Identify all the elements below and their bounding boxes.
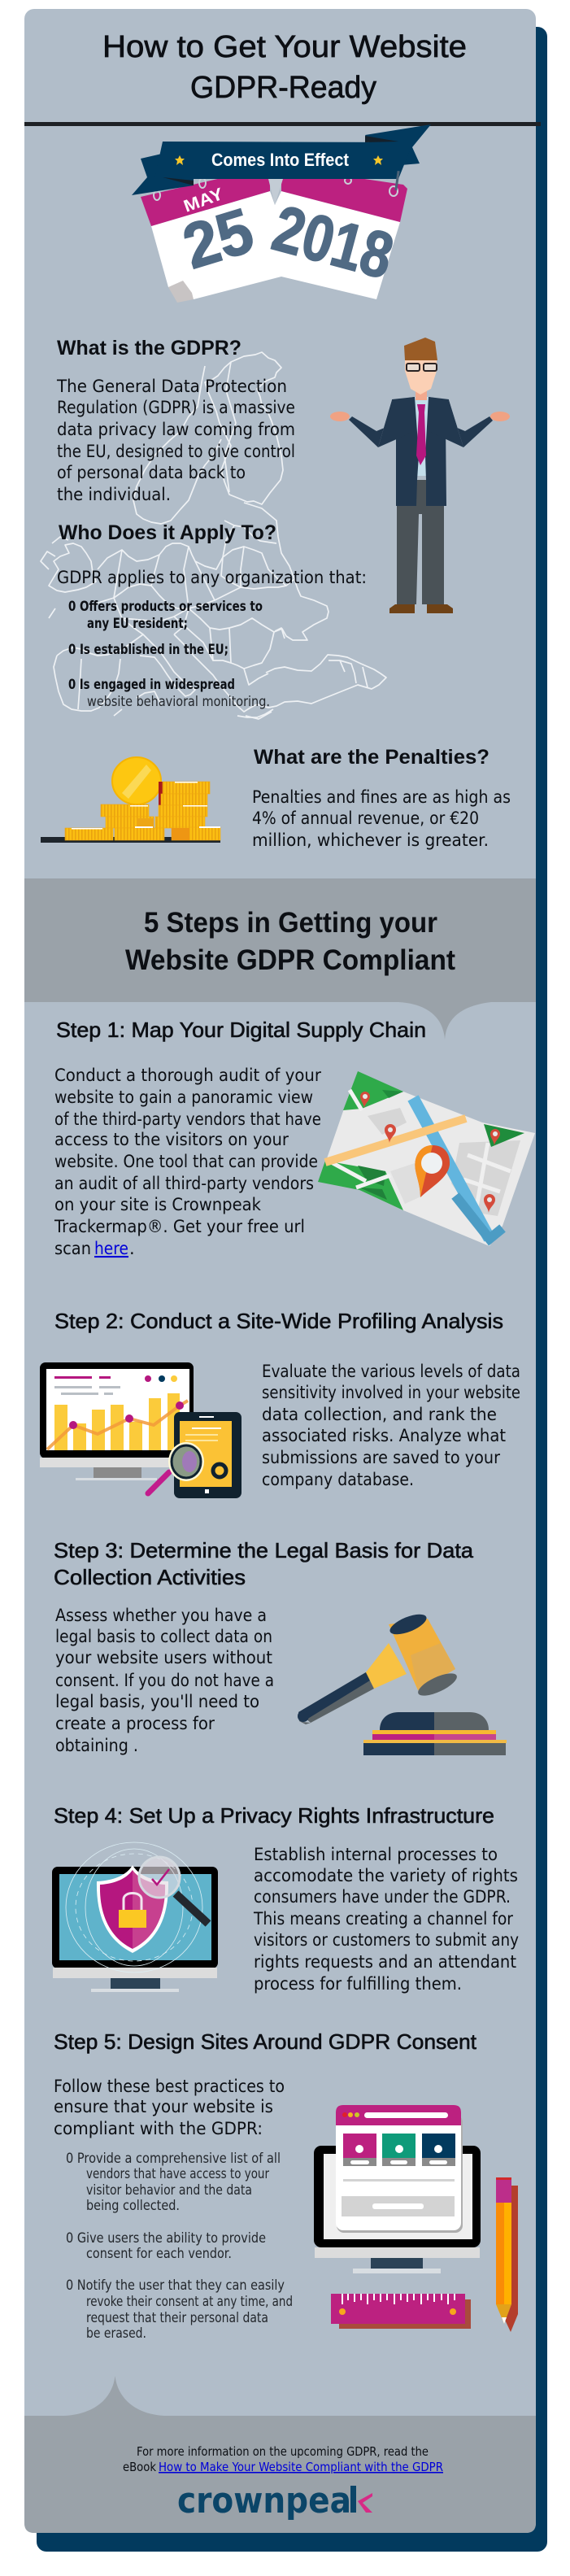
- text: who does it apply to: 0 Is established in the EU;: [68, 642, 228, 658]
- step 1 text: [54, 1066, 321, 1258]
- step 5 intro text: compliant with the GDPR:: [54, 2119, 263, 2138]
- step 4 text: This means creating a channel for: [253, 1909, 513, 1929]
- step 1 text: website to gain a panoramic view: [54, 1087, 313, 1107]
- illustration: laptop with shield and lock: [52, 1842, 218, 1992]
- text: what are the penalties: [252, 746, 511, 850]
- footer text: How to Make Your Website Compliant with the GDPR: [159, 2460, 443, 2474]
- footer band: [24, 2376, 536, 2533]
- text: who does it apply to: [57, 521, 367, 709]
- step 5 intro text: [54, 2077, 285, 2138]
- band: 5 steps heading: 5 Steps in Getting your: [144, 907, 437, 939]
- title: How to Get Your Website: [102, 30, 467, 64]
- text: what are the penalties: Penalties and fines are as high as: [252, 787, 511, 807]
- step 2 text: data collection, and rank the: [262, 1405, 497, 1424]
- step 3 text: obtaining .: [55, 1736, 138, 1755]
- step 2 text: company database.: [262, 1470, 414, 1489]
- step 2 text: [262, 1362, 520, 1489]
- Europe map outline: [41, 352, 386, 719]
- step 3 text: legal basis, you'll need to: [55, 1692, 259, 1711]
- step 1 text: Conduct a thorough audit of your: [54, 1066, 321, 1085]
- step 2 heading: Step 2: Conduct a Site-Wide Profiling Analysis: [54, 1309, 503, 1333]
- band: 5 steps heading: [24, 878, 536, 1040]
- text: who does it apply to: GDPR applies to any organization that:: [57, 568, 367, 587]
- step 5 bullet list: [66, 2151, 293, 2341]
- step 4 text: Establish internal processes to: [254, 1845, 498, 1864]
- illustration: monitor with consent web page: [314, 2105, 481, 2273]
- footer text: eBook: [123, 2460, 156, 2474]
- step 1 text: .: [129, 1239, 135, 1258]
- text: what are the penalties: What are the Penalties?: [254, 746, 490, 769]
- step 4 text: visitors or customers to submit any: [254, 1930, 519, 1950]
- step 1 text: scan: [54, 1239, 91, 1258]
- step 5 bullet list: 0 Notify the user that they can easily: [66, 2277, 285, 2293]
- footer text: For more information on the upcoming GDPR, read the: [137, 2444, 429, 2459]
- step 5 bullet list: consent for each vendor.: [86, 2246, 232, 2261]
- step 5 intro text: ensure that your website is: [54, 2097, 273, 2116]
- step 5 bullet list: revoke their consent at any time, and: [86, 2294, 293, 2309]
- step 5 intro text: Follow these best practices to: [54, 2077, 285, 2096]
- step 5 bullet list: 0 Provide a comprehensive list of all: [66, 2151, 281, 2166]
- step 3 text: Assess whether you have a: [55, 1606, 267, 1625]
- illustration: pencil: [496, 2177, 518, 2332]
- illustration: monitor and tablet analytics: [40, 1362, 241, 1498]
- step 1 heading: Step 1: Map Your Digital Supply Chain: [56, 1018, 426, 1042]
- text: what is the GDPR: Regulation (GDPR) is a massive: [57, 398, 295, 417]
- ribbon banner: Comes Into Effect: [211, 150, 350, 170]
- text: what are the penalties: 4% of annual revenue, or €20: [252, 809, 479, 828]
- text: what is the GDPR: the individual.: [57, 485, 171, 504]
- step 3 text: [55, 1606, 274, 1755]
- band: 5 steps heading: Website GDPR Compliant: [125, 944, 455, 976]
- step 2 text: sensitivity involved in your website: [262, 1383, 520, 1402]
- step 4 text: process for fulfilling them.: [254, 1974, 462, 1994]
- step 1 text: website. One tool that can provide: [54, 1152, 318, 1171]
- step 3 text: create a process for: [55, 1714, 215, 1733]
- illustration: gavel: [298, 1611, 507, 1755]
- step 5 bullet list: being collected.: [86, 2198, 180, 2213]
- step 2 text: associated risks. Analyze what: [262, 1426, 506, 1445]
- illustration: man shrugging: [330, 338, 510, 613]
- step 5 bullet list: 0 Give users the ability to provide: [66, 2230, 266, 2246]
- illustration: gold coins: [41, 757, 220, 843]
- ribbon banner: [132, 124, 431, 195]
- text: what are the penalties: million, whichever is greater.: [252, 830, 489, 850]
- step 4 text: accomodate the variety of rights: [254, 1866, 518, 1885]
- step 5 bullet list: visitor behavior and the data: [86, 2182, 252, 2198]
- illustration: map with pins: [318, 1071, 535, 1246]
- step 3 text: consent. If you do not have a: [55, 1671, 274, 1690]
- step 3 heading: [54, 1538, 474, 1589]
- calendar: May 25 2018: 2018: [266, 191, 401, 293]
- text: who does it apply to: 0 Is engaged in widespread: [68, 677, 235, 693]
- step 1 text: here: [94, 1239, 128, 1258]
- text: what is the GDPR: What is the GDPR?: [57, 337, 241, 360]
- step 5 bullet list: be erased.: [86, 2325, 146, 2341]
- step 3 heading: Collection Activities: [54, 1565, 246, 1589]
- step 3 text: legal basis to collect data on: [55, 1627, 272, 1646]
- text: who does it apply to: website behavioral monitoring.: [87, 694, 270, 709]
- step 4 heading: Step 4: Set Up a Privacy Rights Infrastructure: [54, 1803, 494, 1828]
- calendar: May 25 2018: MAY: [181, 185, 226, 216]
- step 1 text: Trackermap®. Get your free url: [54, 1217, 305, 1236]
- text: what is the GDPR: [56, 337, 295, 504]
- title: GDPR-Ready: [190, 71, 376, 105]
- step 1 text: on your site is Crownpeak: [54, 1195, 262, 1214]
- step 3 text: your website users without: [55, 1648, 272, 1667]
- calendar: May 25 2018: 25: [175, 194, 261, 282]
- step 2 text: submissions are saved to your: [262, 1448, 500, 1467]
- footer text: [123, 2444, 443, 2474]
- step 4 text: rights requests and an attendant: [254, 1952, 516, 1972]
- text: what is the GDPR: the EU, designed to give control: [57, 442, 295, 461]
- logo: crownpeak: crownpeak: [177, 2480, 374, 2522]
- text: who does it apply to: 0 Offers products or services to: [68, 599, 263, 615]
- illustration: ruler: [331, 2294, 471, 2329]
- text: what is the GDPR: data privacy law coming from: [57, 420, 295, 439]
- step 5 heading: Step 5: Design Sites Around GDPR Consent: [54, 2029, 477, 2054]
- calendar: May 25 2018: [141, 167, 407, 303]
- step 2 text: Evaluate the various levels of data: [262, 1362, 520, 1381]
- step 1 text: access to the visitors on your: [54, 1130, 289, 1149]
- step 4 text: consumers have under the GDPR.: [254, 1887, 511, 1907]
- step 1 text: an audit of all third-party vendors: [54, 1174, 314, 1193]
- step 5 bullet list: vendors that have access to your: [86, 2166, 269, 2182]
- text: who does it apply to: any EU resident;: [87, 616, 188, 632]
- title: [102, 30, 467, 105]
- text: what is the GDPR: The General Data Protection: [56, 377, 287, 396]
- step 5 bullet list: request that their personal data: [86, 2310, 268, 2325]
- text: who does it apply to: Who Does it Apply To?: [59, 521, 276, 544]
- step 1 text: of the third-party vendors that have: [54, 1109, 321, 1129]
- step 4 text: [253, 1845, 519, 1994]
- text: what is the GDPR: of personal data back to: [57, 463, 246, 482]
- step 3 heading: Step 3: Determine the Legal Basis for Data: [54, 1538, 474, 1563]
